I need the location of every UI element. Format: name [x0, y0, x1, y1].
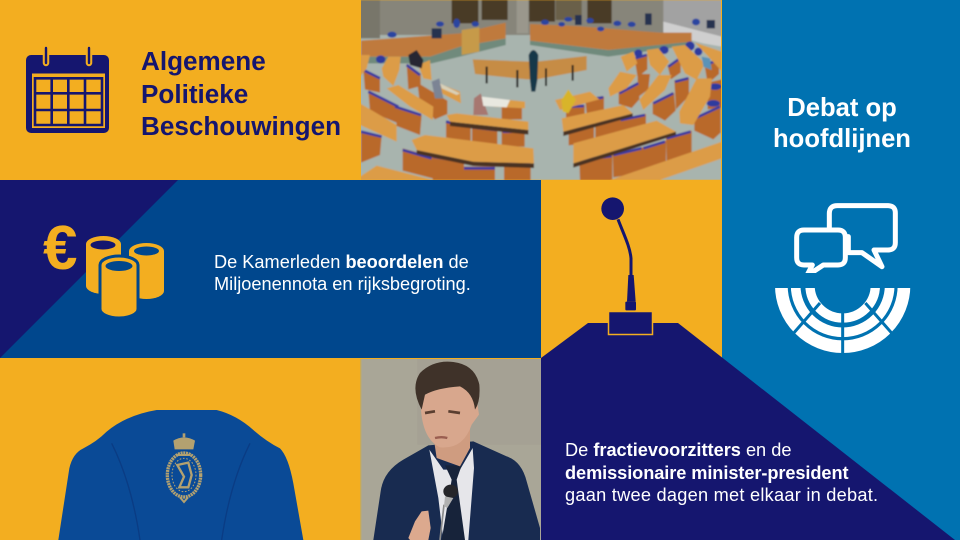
text: fractievoorzitters debat: gaan twee dagen met elkaar in debat. — [565, 485, 878, 505]
title: Algemene — [141, 46, 266, 76]
panel: chair background — [0, 358, 361, 540]
icon: speech bubbles — [794, 203, 898, 273]
photo: minister-president — [360, 359, 541, 540]
text: fractievoorzitters debat: demissionaire minister-president — [565, 462, 848, 482]
icon: euro sign: € — [43, 214, 77, 283]
panel: microphone background — [541, 180, 722, 360]
title: Beschouwingen — [141, 111, 341, 141]
microphone base box — [608, 312, 652, 334]
text: kamerleden beoordelen — [214, 252, 471, 294]
heading: debat op hoofdlijnen: Debat op — [787, 94, 897, 122]
illustration: chair with crest — [58, 410, 304, 540]
title: Politieke — [141, 78, 248, 108]
decorative navy triangle panel — [0, 180, 178, 358]
text: kamerleden beoordelen: Miljoenennota en rijksbegroting. — [214, 274, 471, 294]
illustration: microphone on lectern — [601, 197, 636, 310]
panel: right blue column — [722, 0, 960, 540]
panel: title background — [0, 0, 361, 180]
text: fractievoorzitters debat: De fractievoorzitters en de — [565, 440, 791, 460]
text: kamerleden beoordelen: De Kamerleden beoordelen de — [214, 252, 469, 272]
icon: coin stacks — [86, 236, 164, 316]
icon: royal crest — [167, 433, 201, 502]
photo: plenary chamber — [361, 0, 721, 180]
microphone — [601, 197, 636, 310]
panel: budget band — [0, 180, 541, 358]
title — [141, 46, 341, 141]
text: fractievoorzitters debat — [565, 440, 878, 505]
icon: parliament seating — [775, 273, 910, 353]
icon: calendar — [26, 46, 109, 133]
heading: debat op hoofdlijnen — [773, 94, 911, 152]
heading: debat op hoofdlijnen: hoofdlijnen — [773, 124, 911, 152]
